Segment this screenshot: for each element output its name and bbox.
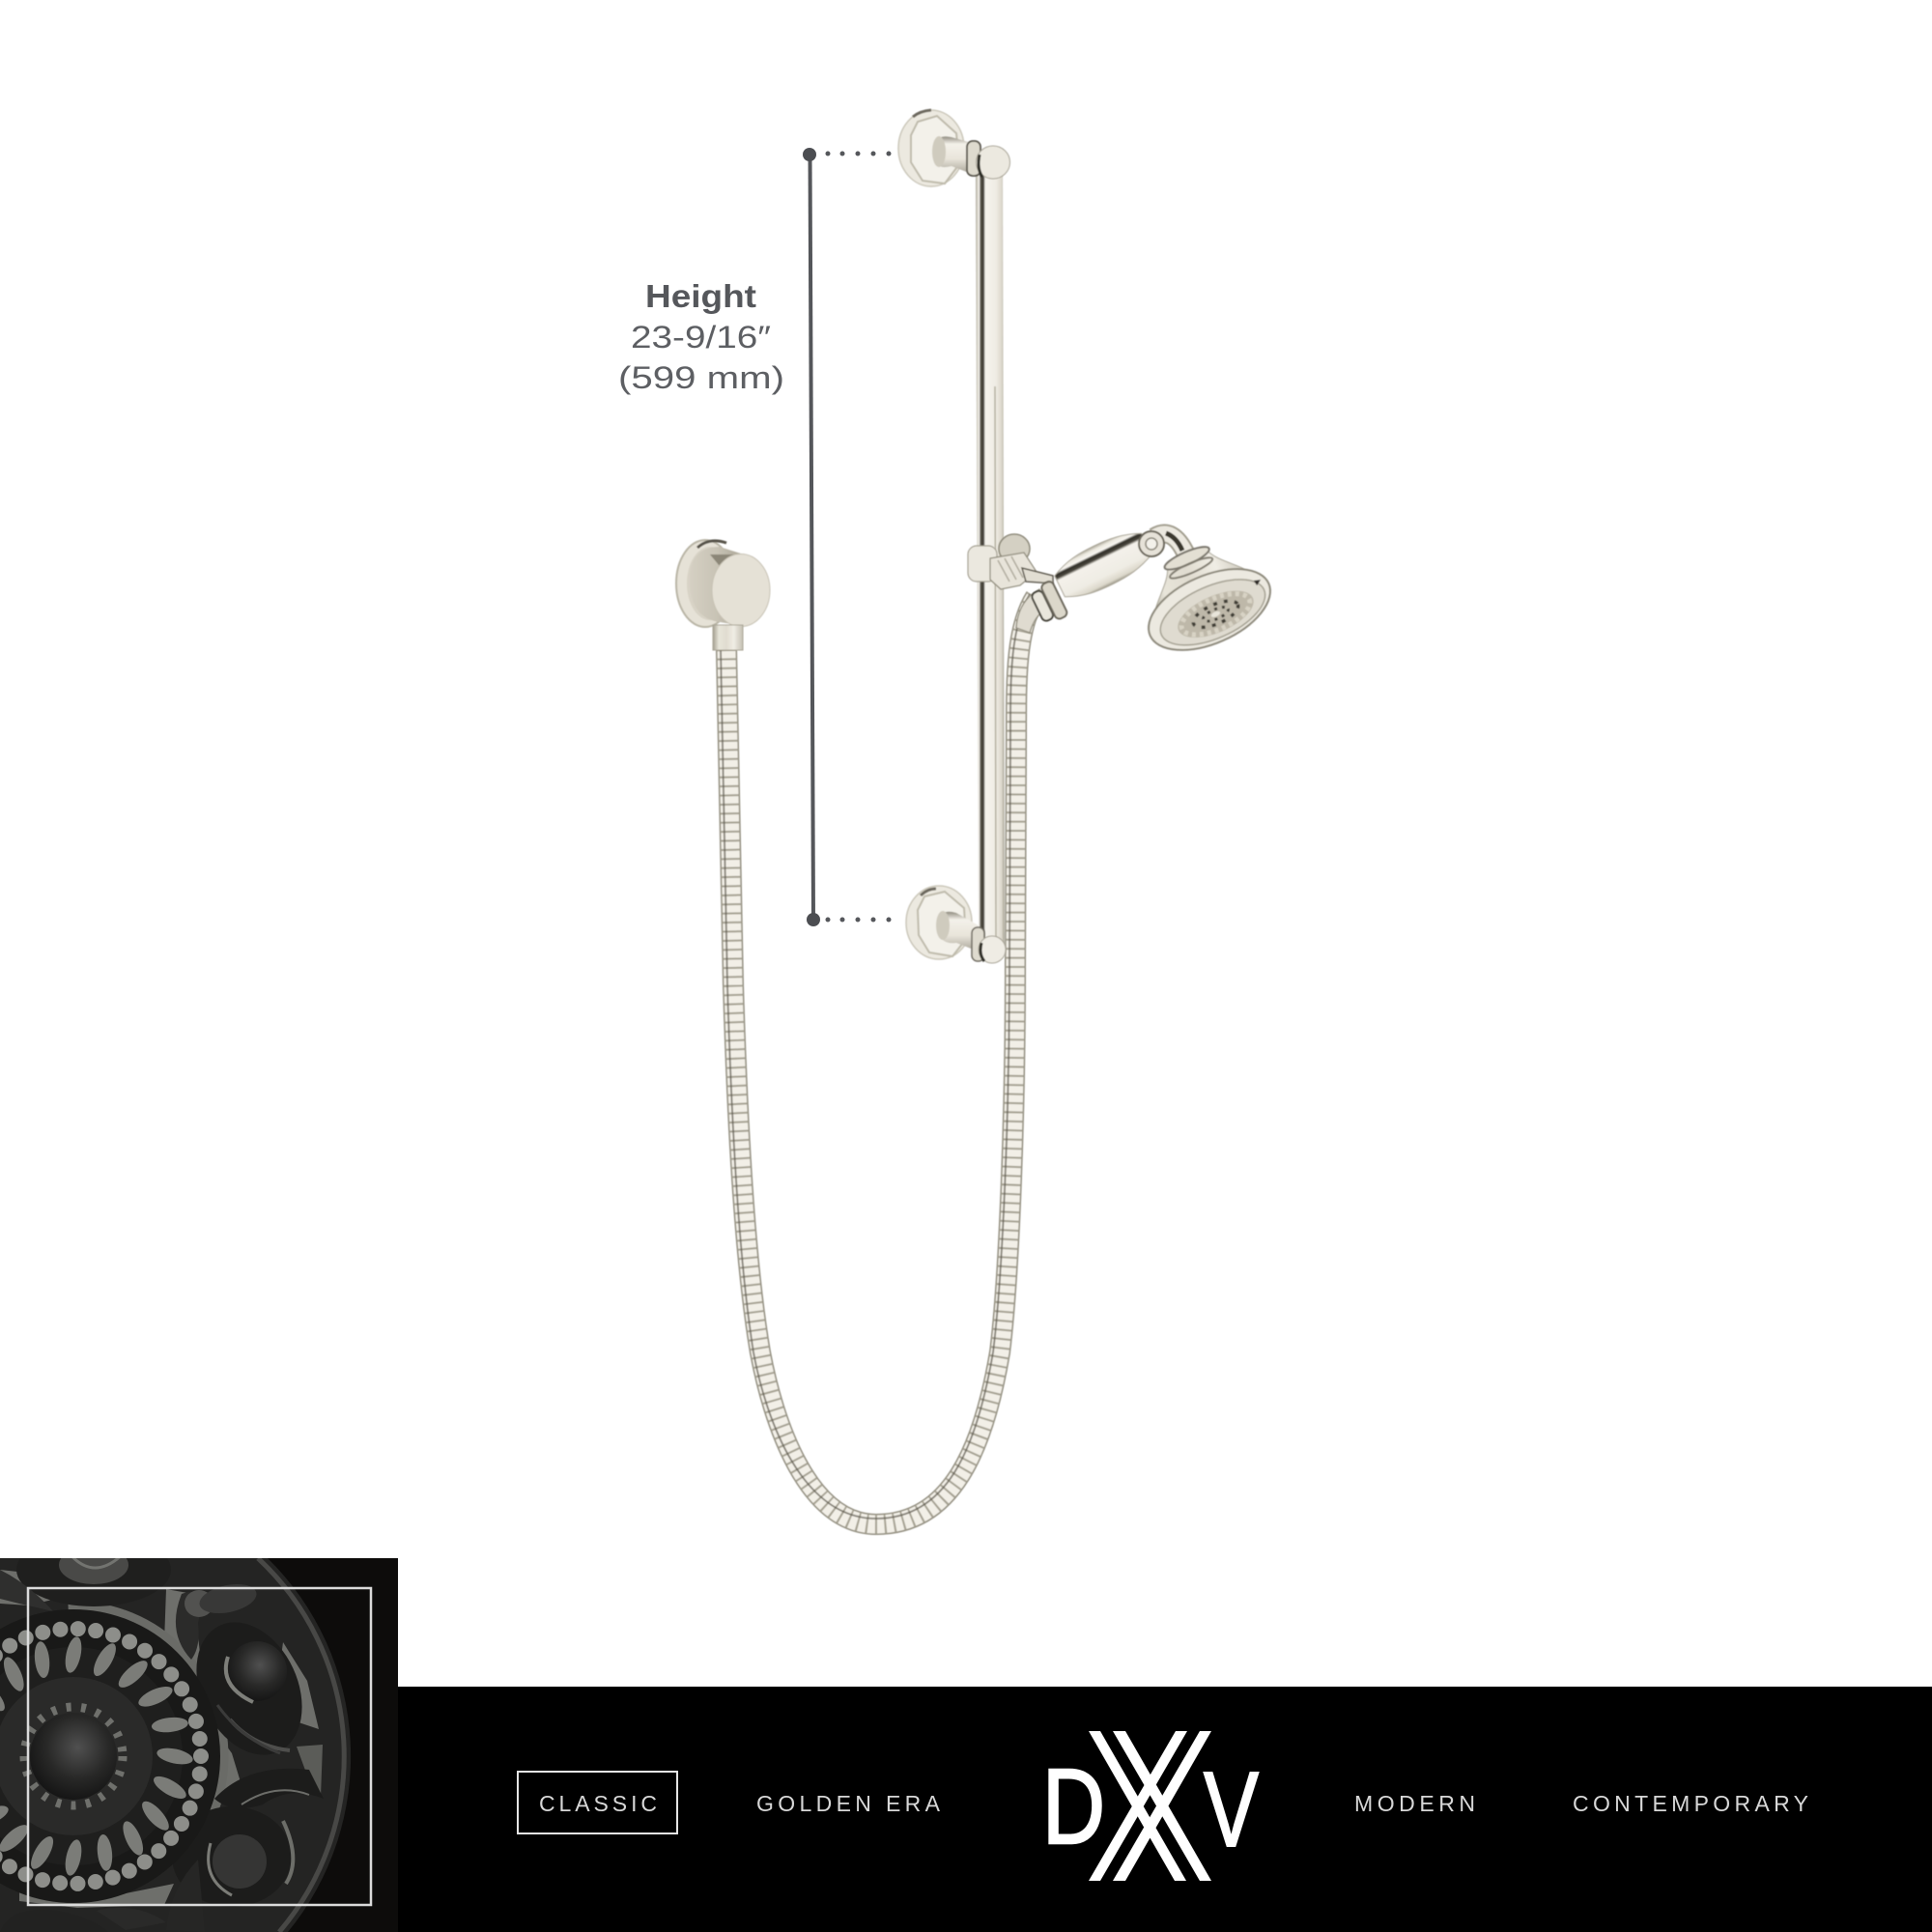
medallion disc bbox=[0, 1558, 351, 1932]
product: bottom wall mount bbox=[906, 886, 1006, 963]
logo letter V: V bbox=[1204, 1750, 1259, 1869]
end cap bbox=[979, 936, 1006, 963]
leaf: upper right bbox=[176, 1579, 259, 1660]
central dome bbox=[30, 1713, 117, 1800]
petals bbox=[0, 1635, 194, 1877]
logo crossed X bbox=[1089, 1731, 1211, 1881]
product: shower head bbox=[1125, 526, 1282, 667]
dimension callout: height bbox=[618, 148, 891, 926]
logo: DXV bbox=[1042, 1731, 1259, 1881]
wall plate bbox=[676, 540, 734, 627]
footer nav: contemporary: CONTEMPORARY bbox=[1573, 1791, 1808, 1816]
swivel joint bbox=[1139, 531, 1164, 556]
height label: (599 mm) bbox=[618, 360, 784, 395]
product: top wall mount bbox=[898, 110, 1010, 186]
footer nav: modern: MODERN bbox=[1354, 1791, 1475, 1816]
head rim bbox=[1137, 553, 1282, 667]
head dome bbox=[1134, 535, 1261, 629]
rosette: top bbox=[0, 1558, 128, 1611]
post bbox=[939, 912, 979, 952]
handle body bbox=[1050, 525, 1156, 606]
dotted leader: bottom bbox=[825, 918, 891, 922]
footer nav: classic (selected) bbox=[518, 1772, 677, 1833]
ground ring bbox=[68, 1604, 228, 1810]
height label: Height bbox=[645, 278, 756, 314]
cap collar bbox=[967, 141, 980, 176]
arm bbox=[1022, 568, 1053, 583]
dimension line bbox=[803, 148, 820, 926]
beaded ring band bbox=[0, 1629, 201, 1884]
ground patches bbox=[0, 1570, 323, 1908]
beads bbox=[0, 1629, 201, 1884]
product: flexible hose bbox=[721, 594, 1036, 1524]
rosette: lower right bbox=[174, 1806, 296, 1902]
product: wall outlet bbox=[676, 540, 770, 650]
panel: ornament medallion bbox=[0, 1533, 398, 1932]
product: slider and arm bbox=[968, 534, 1053, 589]
cap collar bbox=[972, 927, 984, 961]
product: slide bar bbox=[976, 169, 1005, 952]
outlet body bbox=[690, 547, 744, 626]
sun spikes bbox=[24, 1707, 123, 1805]
dotted leader: top bbox=[825, 151, 891, 156]
leaves: right middle bbox=[214, 1769, 324, 1808]
inner field bbox=[0, 1677, 153, 1835]
leaves: bottom bbox=[0, 1908, 166, 1932]
spray face bbox=[1171, 582, 1261, 647]
post bbox=[935, 136, 972, 174]
swivel neck bbox=[1154, 534, 1186, 554]
end cap bbox=[976, 146, 1010, 179]
outlet face bbox=[712, 554, 770, 626]
height label bbox=[618, 278, 784, 395]
slider clamp bbox=[968, 546, 997, 582]
hose connector bbox=[1016, 589, 1051, 633]
handle collar bbox=[1029, 581, 1068, 626]
height label: 23-9/16″ bbox=[631, 320, 771, 355]
black footer band bbox=[398, 1687, 1932, 1932]
footer nav: classic (selected): CLASSIC bbox=[539, 1791, 657, 1816]
product: hand shower handle bbox=[1016, 525, 1186, 633]
frame bbox=[28, 1588, 371, 1905]
rosette: upper right bbox=[196, 1623, 302, 1754]
outlet neck bbox=[713, 625, 743, 650]
knurled knob bbox=[990, 553, 1037, 589]
footer nav: golden era: GOLDEN ERA bbox=[756, 1791, 941, 1816]
logo letter D: D bbox=[1042, 1747, 1105, 1866]
